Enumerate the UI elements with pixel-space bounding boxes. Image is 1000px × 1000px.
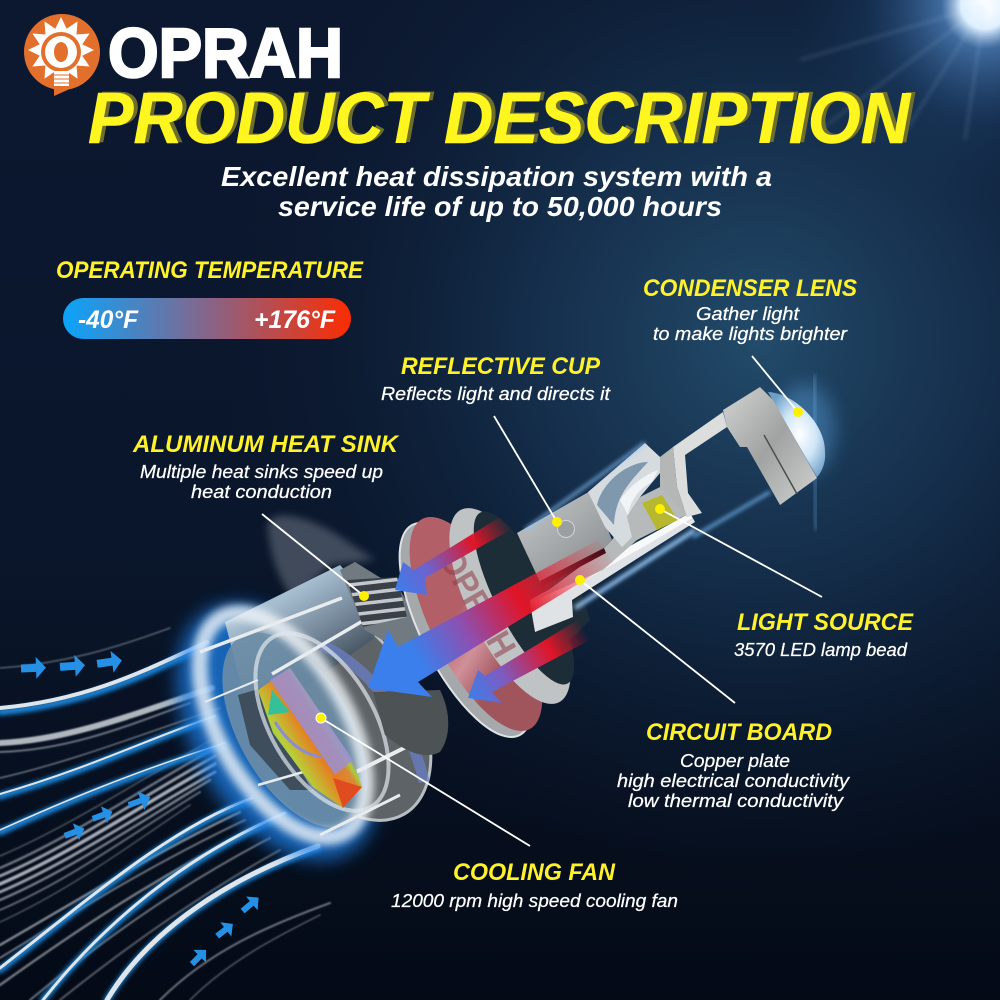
dark fan internals [238,688,312,790]
logo icon: orange sun bulb [24,14,100,96]
callout: circuit board: high electrical conductivity [617,770,851,791]
low temperature: -40°F [78,306,139,334]
callout: circuit board [617,719,851,811]
smoke swirl [268,516,375,600]
copper slot [540,548,606,587]
fan cavity [193,608,397,852]
leader: light source [655,504,822,597]
shaft blue glow [525,443,645,530]
callout: aluminum heat sink: ALUMINUM HEAT SINK [132,431,400,458]
logo [24,14,343,96]
mid metal under cup [535,487,690,600]
callout: reflective cup: REFLECTIVE CUP [401,353,601,380]
arrow: top heat flow [395,517,510,595]
blue inner band [322,645,424,782]
callout: circuit board: low thermal conductivity [628,790,845,811]
subtitle: Excellent heat dissipation system with a [221,161,772,192]
callout: circuit board: CIRCUIT BOARD [646,719,832,746]
LED chip [642,495,678,530]
subtitle: service life of up to 50,000 hours [278,191,722,222]
lens holder [660,375,835,537]
rear dark body [505,530,590,680]
callout: condenser lens: to make lights brighter [653,323,848,344]
upper gray block [517,490,612,582]
grey rim [373,505,559,755]
flange base rings [373,492,595,755]
air streams flowing into the fan [0,628,330,1000]
leader: reflective cup [494,416,562,527]
leader lines and dots [262,356,822,846]
leader: circuit board [575,575,735,703]
callout: reflective cup [381,353,611,404]
ring pink face [383,499,569,749]
operating temperature [56,257,364,339]
light inner ring [425,492,595,720]
holder block [723,387,817,505]
LED bulb shaft [517,443,695,632]
callout: aluminum heat sink: Multiple heat sinks speed up [140,461,383,482]
callout: reflective cup: Reflects light and directs it [381,383,611,404]
arm inner face [660,447,687,517]
callout: circuit board: Copper plate [680,750,790,771]
arm [673,412,727,517]
lower rail body [530,513,695,632]
housing cylinder [225,565,385,720]
callout: cooling fan [391,859,678,911]
chrome reflector cup [588,443,660,547]
leader: heat sink [262,514,369,601]
watermark: OPRAH [431,543,523,664]
callout: light source: LIGHT SOURCE [737,609,914,636]
blue glow around fan [135,569,421,895]
cap knob below flange [373,690,448,755]
callout: cooling fan: 12000 rpm high speed cooling fan [391,890,678,911]
callout: cooling fan: COOLING FAN [453,859,616,886]
fan housing [135,516,466,895]
callout: aluminum heat sink [132,431,400,502]
lower beam [693,492,770,537]
lens dome [768,392,825,477]
title: PRODUCT DESCRIPTION [88,79,912,159]
small blue air arrows [21,649,264,970]
leader: condenser lens [752,356,803,417]
callout: light source: 3570 LED lamp bead [734,639,908,660]
callout: condenser lens [643,275,857,344]
arrow: low heat flow [468,620,590,703]
front ring haze [166,586,400,864]
callout: condenser lens: CONDENSER LENS [643,275,857,302]
temperature heading: OPERATING TEMPERATURE [56,257,364,284]
second ring [228,611,416,833]
logo wordmark: OPRAH [108,14,343,92]
arrow: main heat flow [368,540,614,697]
cooling fan blade heat map [258,668,362,808]
white housing rails [200,598,410,835]
dark centre [455,500,593,696]
callout: condenser lens: Gather light [696,303,800,324]
leader: cooling fan [316,713,530,846]
lens bloom [775,384,835,476]
callout: aluminum heat sink: heat conduction [191,481,332,502]
high temperature: +176°F [254,306,336,334]
inner grey plate [224,574,466,850]
temperature pill [63,298,351,339]
callout: light source [734,609,914,660]
screw [558,520,574,538]
aluminum heat sink [340,562,419,647]
subtitle [221,161,772,222]
white rail [530,513,692,611]
